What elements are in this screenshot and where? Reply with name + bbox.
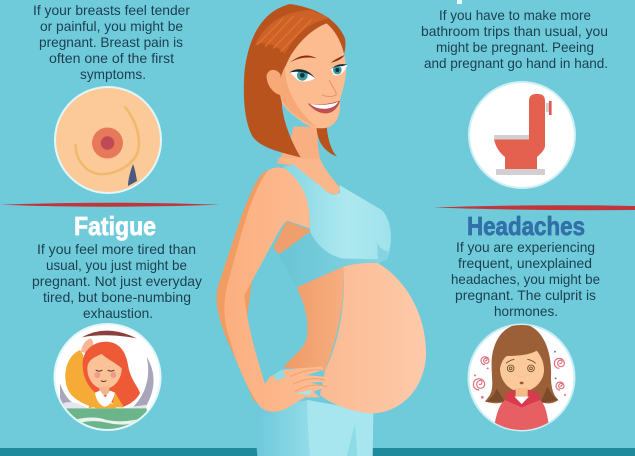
text: breast tenderness: If your breasts feel tender [33, 2, 190, 18]
text: breast tenderness: often one of the first [49, 50, 174, 66]
text: fatigue: usual, you just might be [46, 257, 187, 273]
woman head [244, 4, 347, 170]
text: headaches: pregnant. The culprit is [455, 287, 596, 303]
text: headaches: hormones. [494, 303, 558, 319]
text: headaches: headaches, you might be [451, 271, 600, 287]
icon: breast [55, 87, 161, 193]
icon: woman with headache [468, 324, 574, 432]
heading: Headaches: Headaches [467, 211, 585, 241]
divider right [433, 205, 635, 210]
text: frequent urination: If you have to make more [439, 7, 591, 23]
icon: toilet [469, 82, 575, 188]
text: fatigue: exhaustion. [83, 305, 153, 321]
heading fragment: cropped top heading [457, 0, 462, 4]
text: fatigue: tired, but bone-numbing [43, 289, 191, 305]
text: headaches: frequent, unexplained [458, 255, 592, 271]
text: headaches: If you are experiencing [456, 239, 595, 255]
text: breast tenderness: symptoms. [80, 66, 146, 82]
text: frequent urination [421, 7, 608, 71]
text: fatigue: If you feel more tired than [37, 241, 196, 257]
text: fatigue [32, 241, 202, 321]
illustration: pregnant woman [217, 4, 426, 456]
text: breast tenderness: pregnant. Breast pain is [39, 34, 183, 50]
text: headaches [451, 239, 600, 319]
text: breast tenderness [33, 2, 190, 82]
text: breast tenderness: or painful, you might be [40, 18, 183, 34]
heading: Fatigue: Fatigue [74, 211, 156, 241]
text: frequent urination: might be pregnant. Peeing [436, 39, 594, 55]
icon: tired woman [54, 324, 160, 430]
woman body [217, 158, 426, 456]
divider left [0, 203, 220, 207]
text: fatigue: pregnant. Not just everyday [32, 273, 202, 289]
bottom band [0, 448, 635, 456]
text: frequent urination: bathroom trips than usual, you [421, 23, 608, 39]
text: frequent urination: and pregnant go hand in hand. [424, 55, 608, 71]
